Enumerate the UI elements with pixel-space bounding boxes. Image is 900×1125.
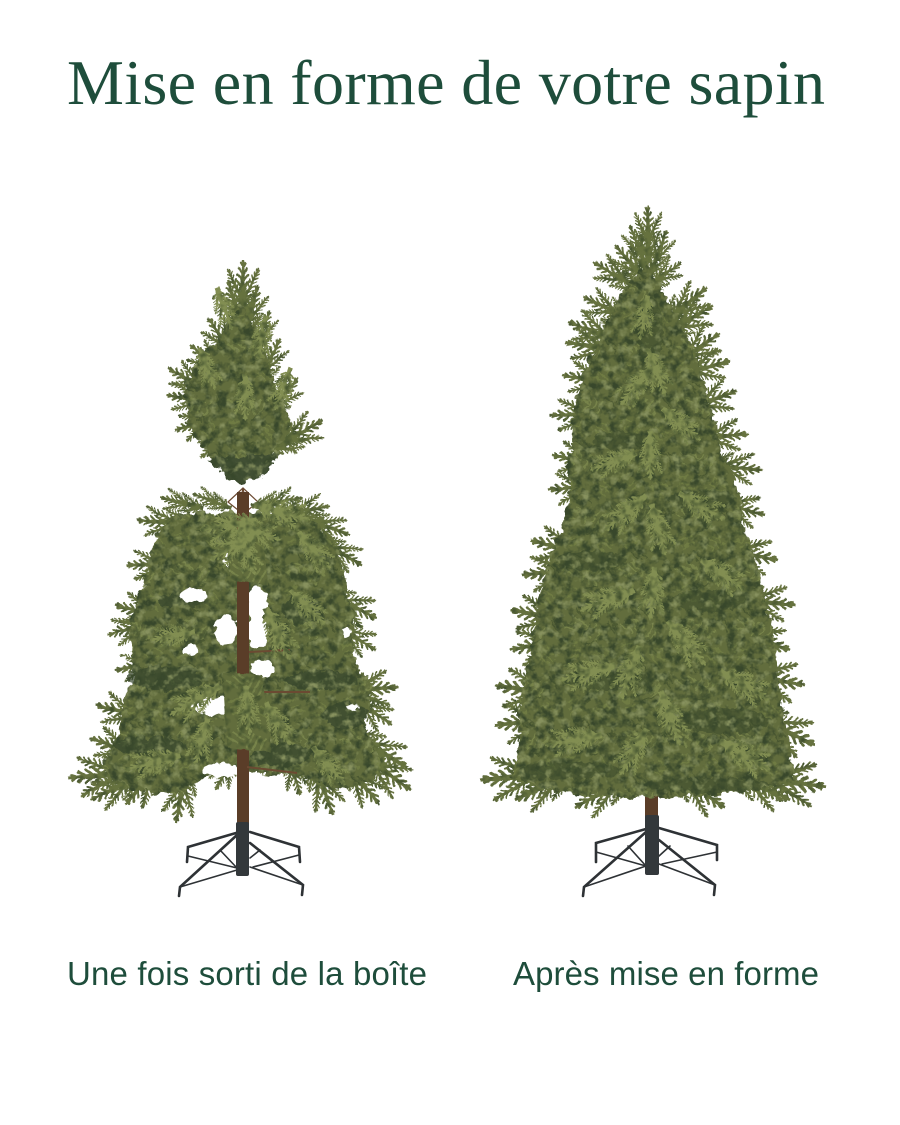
metal stand <box>583 815 717 896</box>
tree: after shaping <box>478 205 830 896</box>
foliage mass <box>100 512 380 795</box>
top section of tree <box>159 260 333 514</box>
foliage body <box>510 262 795 798</box>
lower section of tree <box>66 482 424 827</box>
trunk <box>237 492 310 827</box>
caption: after shaping: Après mise en forme <box>513 955 819 992</box>
tree: out of the box (unshaped) <box>66 260 424 896</box>
caption: out of the box: Une fois sorti de la boîte <box>67 955 427 992</box>
trunk <box>645 780 658 820</box>
lighter front fronds <box>542 294 779 786</box>
outer branch tips <box>478 205 830 828</box>
gaps between branch tiers <box>114 549 358 777</box>
branches covering trunk <box>120 488 357 795</box>
outer branch tips <box>66 482 424 827</box>
title: Mise en forme de votre sapin <box>67 47 825 118</box>
metal stand <box>179 822 303 896</box>
